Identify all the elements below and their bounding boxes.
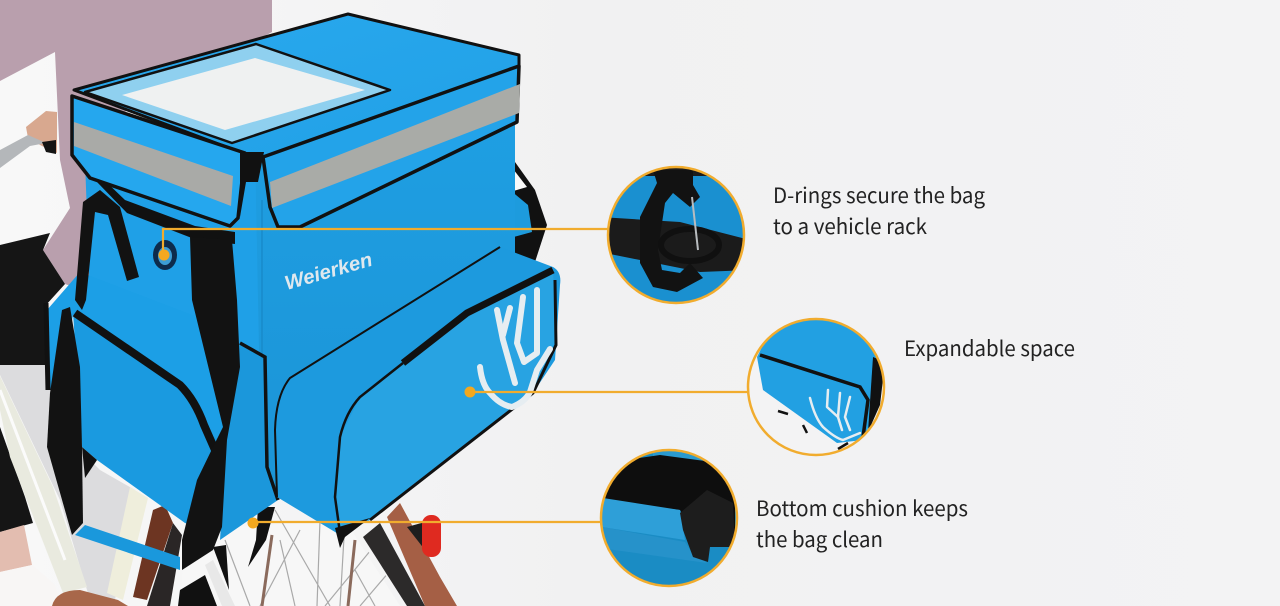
left strap [47,307,83,535]
callout connector lines [158,229,750,528]
pocket hand logo [480,290,550,407]
lid [72,14,520,227]
grey ground behind frame [0,365,135,600]
rider trousers [0,233,65,365]
bicycle frame [0,376,148,606]
left pocket [46,272,278,540]
strap tail [248,507,275,567]
lid corner gusset [240,152,264,217]
lid front right face [263,66,519,227]
pocket front face [73,313,226,535]
D-ring hole [153,240,177,270]
right pocket [275,247,560,548]
pocket side [220,343,278,540]
bicycle and rider [0,0,457,606]
rider hand and handlebar [0,111,57,168]
label: bottom cushion [756,493,968,554]
pocket bottom edge [335,518,370,548]
label: D-rings: to a vehicle rack [773,211,927,241]
straps [47,190,240,570]
lid front left face [72,96,245,226]
bag logo: Weierken [282,249,375,295]
delivery bag [46,14,560,570]
bag main body [85,100,515,500]
label: D-rings [773,180,985,241]
detail circle: expandable pocket [745,315,890,460]
rear reflector [407,515,441,557]
bottom strap [75,525,180,570]
rider leg and shoe [0,525,32,572]
rear wheel [133,503,457,606]
label: bottom cushion: the bag clean [756,524,883,554]
pocket top face [47,272,263,440]
detail circle: bottom cushion [598,448,740,590]
label: expandable space: Expandable space [904,333,1075,363]
left strap loop [75,190,139,310]
webbing [97,176,235,244]
rider shirt [0,0,272,300]
label: bottom cushion: Bottom cushion keeps [756,493,968,523]
lid window [85,44,390,143]
side bag behind [505,155,547,262]
label: D-rings: D-rings secure the bag [773,180,985,210]
wheel interior [180,520,400,606]
lid top [74,14,519,160]
detail circle: D-ring [606,166,746,304]
right strap [182,237,240,570]
